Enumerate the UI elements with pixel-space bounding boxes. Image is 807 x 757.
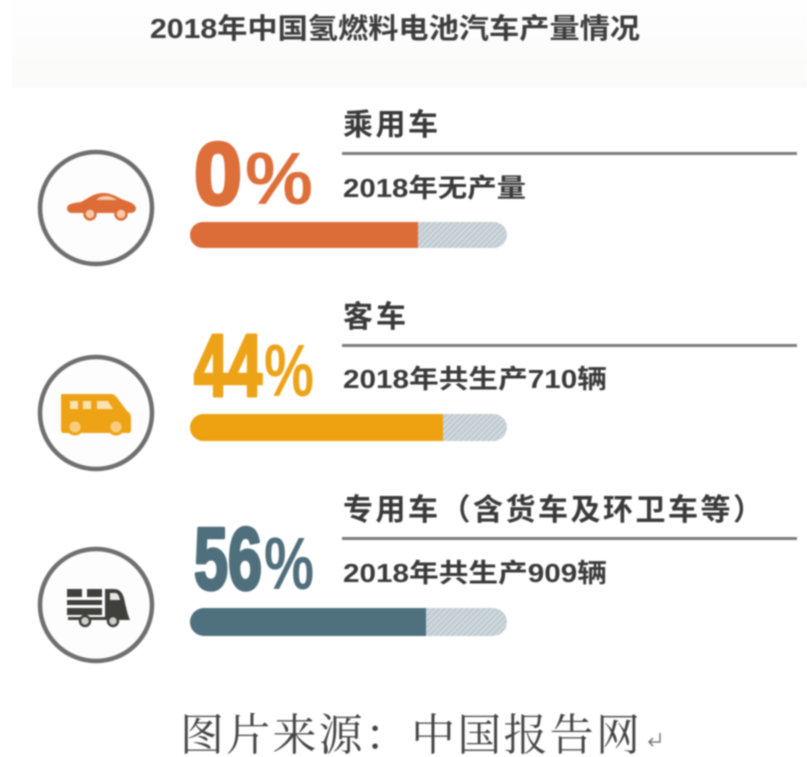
percentage: 44%: % (264, 329, 314, 412)
panel: passenger cars (40, 109, 797, 264)
text: passenger cars production: 2018年无产量 (343, 173, 526, 203)
percentage: 56%: 56 (194, 509, 262, 608)
icon: truck (40, 549, 152, 661)
heading: special vehicles: 专用车（含货车及环卫车等） (343, 494, 763, 527)
icon: car (40, 152, 152, 264)
percentage: 0%: 0 (194, 124, 242, 223)
text: special vehicles production: 2018年共生产909辆 (343, 558, 607, 588)
percentage: 44%: 44 (194, 316, 262, 415)
icon: bus (40, 357, 152, 469)
progress bar: 56% (190, 608, 507, 636)
title: 2018年中国氢燃料电池汽车产量情况 (150, 13, 640, 44)
percentage: 56%: % (264, 522, 314, 605)
text: buses production: 2018年共生产710辆 (343, 364, 607, 394)
icon: return mark (649, 733, 660, 746)
percentage: 0%: % (245, 137, 313, 220)
percentage: 0% (194, 124, 313, 223)
heading: buses: 客车 (343, 301, 406, 334)
progress bar: 44% (190, 414, 507, 441)
panel: special vehicles (40, 494, 797, 661)
heading: passenger cars: 乘用车 (343, 109, 438, 142)
progress bar: 0% (190, 222, 507, 248)
panel: buses (40, 301, 797, 469)
